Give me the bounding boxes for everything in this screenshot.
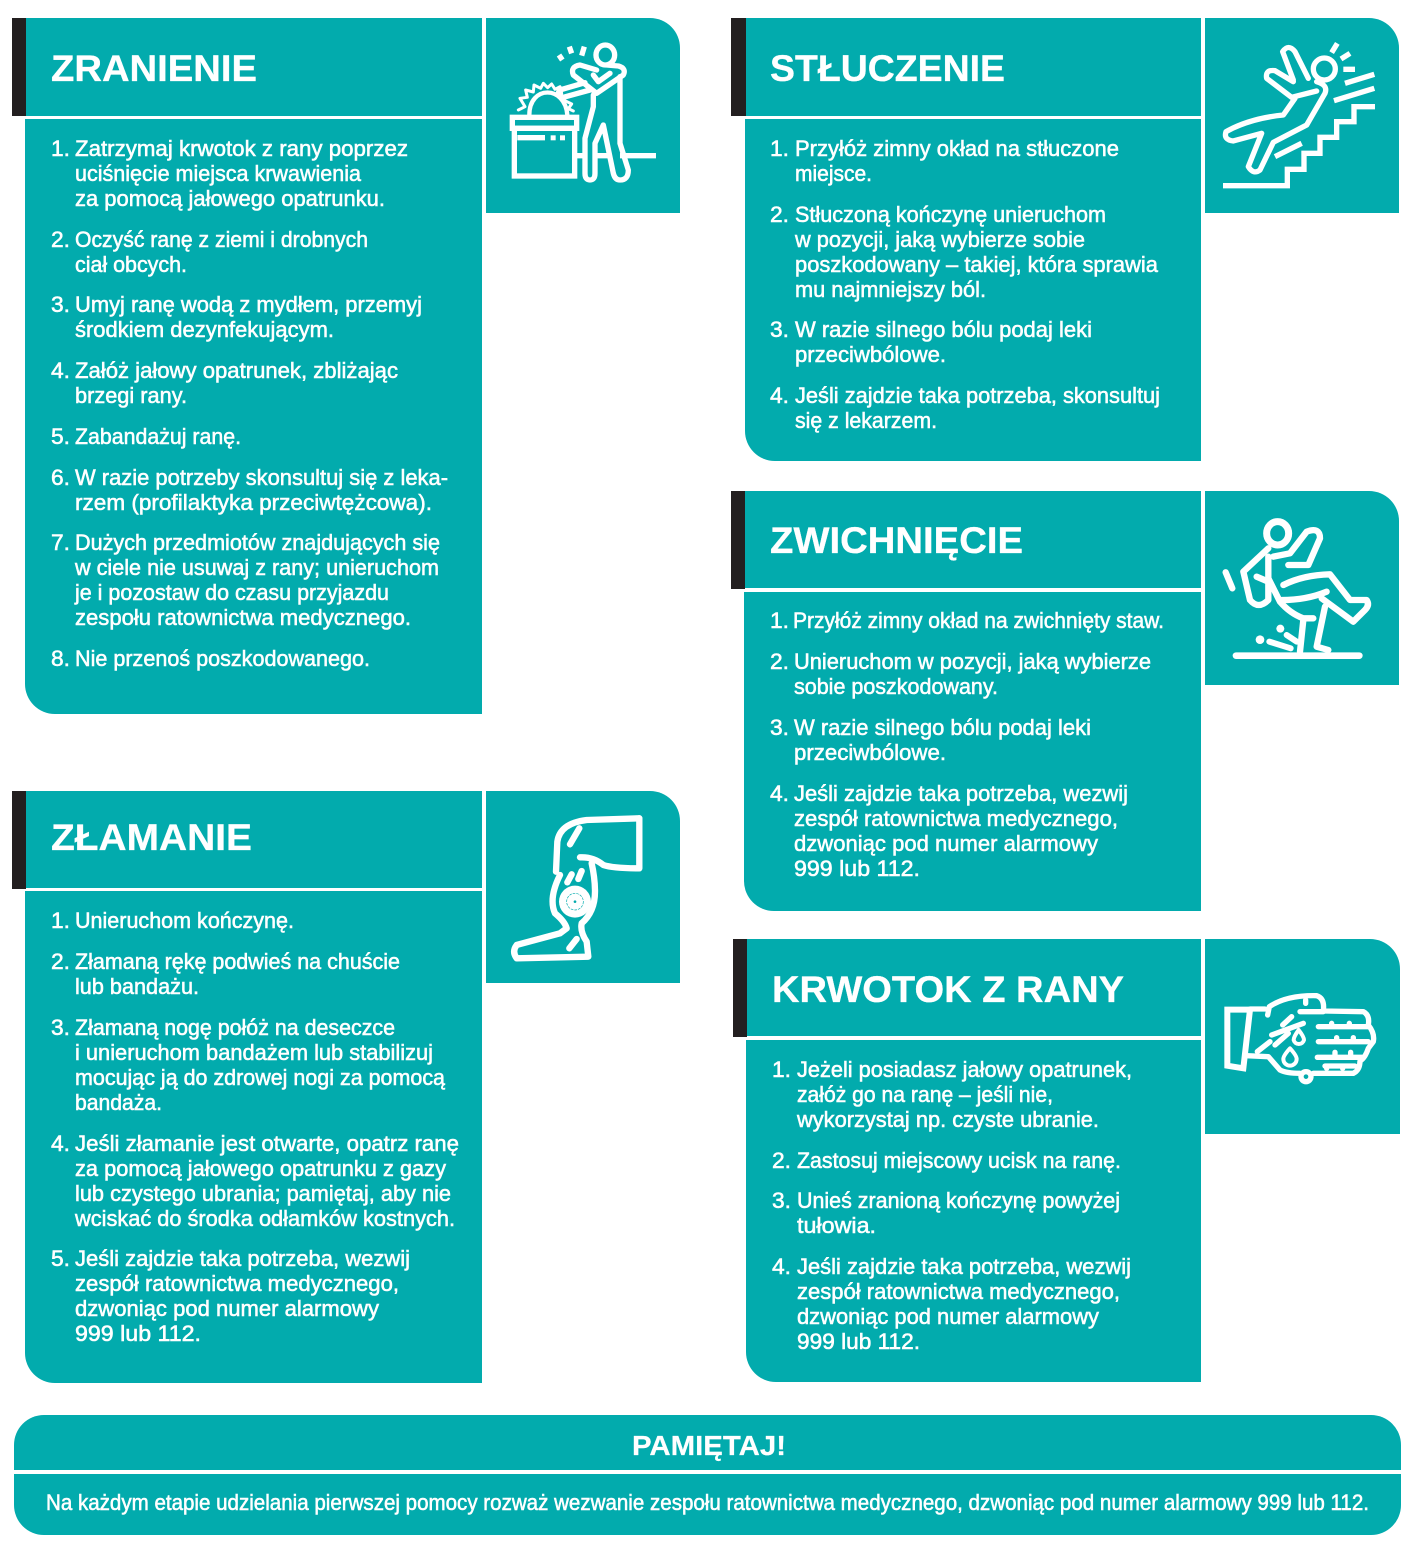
body: krwotok z rany steps: Jeśli zajdzie taka potrzeba, wezwij	[797, 1254, 1131, 1279]
heading: zranienie: ZRANIENIE	[51, 48, 257, 89]
body: zranienie steps: 1.	[51, 136, 70, 161]
body: zwichnięcie steps: Przyłóż zimny okład na zwichnięty staw.	[793, 608, 1164, 633]
body: zranienie steps: Oczyść ranę z ziemi i drobnych	[75, 227, 368, 252]
body: złamanie steps: Jeśli złamanie jest otwarte, opatrz ranę	[75, 1131, 459, 1156]
banner text: reminder	[14, 1474, 1401, 1535]
body: złamanie steps: 3.	[51, 1015, 70, 1040]
body: zranienie steps: 6.	[51, 465, 70, 490]
body: stłuczenie steps: w pozycji, jaką wybierze sobie	[794, 227, 1085, 252]
panel: złamanie	[12, 791, 680, 1383]
body: stłuczenie steps: mu najmniejszy ból.	[795, 277, 986, 302]
panel: zwichnięcie	[731, 491, 1399, 911]
body: zranienie steps: Nie przenoś poszkodowanego.	[75, 646, 370, 671]
body: zranienie steps: środkiem dezynfekującym.	[75, 317, 334, 342]
header bar: krwotok z rany	[733, 939, 1201, 1037]
body: złamanie steps: lub bandażu.	[75, 974, 199, 999]
body: złamanie steps: Złamaną nogę połóż na deseczce	[75, 1015, 395, 1040]
heading: krwotok z rany: KRWOTOK Z RANY	[772, 969, 1124, 1010]
body: zranienie steps: zespołu ratownictwa medycznego.	[75, 605, 411, 630]
body: zranienie steps: Umyj ranę wodą z mydłem, przemyj	[75, 292, 422, 317]
body: złamanie steps: 1.	[51, 908, 70, 933]
body: krwotok z rany steps: 2.	[772, 1148, 791, 1173]
body: zwichnięcie steps	[744, 592, 1201, 911]
body: złamanie steps: 2.	[51, 949, 70, 974]
body: stłuczenie steps: poszkodowany – takiej, która sprawia	[795, 252, 1159, 277]
body: zranienie steps: rzem (profilaktyka przeciwtężcowa).	[75, 490, 432, 515]
body: krwotok z rany steps: Jeżeli posiadasz jałowy opatrunek,	[797, 1057, 1132, 1082]
body: zranienie steps: 5.	[51, 424, 70, 449]
body: złamanie steps: mocując ją do zdrowej nogi za pomocą	[75, 1065, 446, 1090]
body: zranienie steps: 8.	[51, 646, 70, 671]
body: zwichnięcie steps: W razie silnego bólu podaj leki	[794, 715, 1091, 740]
body: stłuczenie steps: 2.	[770, 202, 789, 227]
body: zwichnięcie steps: 1.	[770, 608, 789, 633]
body: złamanie steps: wciskać do środka odłamków kostnych.	[74, 1206, 455, 1231]
body: krwotok z rany steps: wykorzystaj np. czyste ubranie.	[796, 1107, 1099, 1132]
body: złamanie steps: i unieruchom bandażem lub stabilizuj	[75, 1040, 433, 1065]
body: złamanie steps: Jeśli zajdzie taka potrzeba, wezwij	[75, 1246, 410, 1271]
body: stłuczenie steps: 4.	[770, 383, 789, 408]
icon panel: person falling on stairs	[1205, 18, 1399, 213]
body: stłuczenie steps: W razie silnego bólu podaj leki	[795, 317, 1092, 342]
header bar: złamanie	[12, 791, 482, 889]
body: zranienie steps: uciśnięcie miejsca krwawienia	[75, 161, 362, 186]
panel: stłuczenie	[731, 18, 1399, 461]
body: stłuczenie steps: przeciwbólowe.	[795, 342, 946, 367]
body: stłuczenie steps	[745, 119, 1201, 461]
body: złamanie steps: 4.	[51, 1131, 70, 1156]
body: stłuczenie steps: miejsce.	[795, 161, 872, 186]
body: zranienie steps: Zabandażuj ranę.	[75, 424, 241, 449]
body: zranienie steps: Załóż jałowy opatrunek, zbliżając	[75, 358, 398, 383]
body: zwichnięcie steps: przeciwbólowe.	[794, 740, 946, 765]
body: stłuczenie steps: Stłuczoną kończynę unieruchom	[795, 202, 1106, 227]
panel: pamiętaj	[14, 1415, 1401, 1535]
body: krwotok z rany steps	[746, 1040, 1201, 1382]
body: zwichnięcie steps: sobie poszkodowany.	[794, 674, 998, 699]
heading: złamanie: ZŁAMANIE	[51, 817, 252, 858]
banner heading: pamiętaj: PAMIĘTAJ!	[632, 1430, 786, 1461]
header bar: stłuczenie	[731, 18, 1201, 116]
body: krwotok z rany steps: załóż go na ranę – jeśli nie,	[797, 1082, 1053, 1107]
body: zranienie steps: Zatrzymaj krwotok z rany poprzez	[75, 136, 408, 161]
body: zwichnięcie steps: 4.	[770, 781, 789, 806]
body: zwichnięcie steps: zespół ratownictwa medycznego,	[794, 806, 1118, 831]
body: złamanie steps: Złamaną rękę podwieś na chuście	[75, 949, 400, 974]
body: krwotok z rany steps: 3.	[772, 1188, 791, 1213]
body: zwichnięcie steps: Jeśli zajdzie taka potrzeba, wezwij	[794, 781, 1128, 806]
heading: zwichnięcie: ZWICHNIĘCIE	[770, 520, 1023, 561]
body: krwotok z rany steps: 999 lub 112.	[797, 1329, 920, 1354]
icon panel: broken leg	[486, 791, 680, 983]
panel: zranienie	[12, 18, 680, 714]
body: zranienie steps: ciał obcych.	[75, 252, 187, 277]
body: stłuczenie steps: się z lekarzem.	[795, 408, 937, 433]
body: zranienie steps: 3.	[51, 292, 70, 317]
body: zranienie steps: brzegi rany.	[75, 383, 187, 408]
body: zwichnięcie steps: 999 lub 112.	[794, 856, 920, 881]
body: zranienie steps	[25, 119, 482, 714]
body: krwotok z rany steps: Unieś zranioną kończynę powyżej	[797, 1188, 1120, 1213]
body: zranienie steps: w ciele nie usuwaj z rany; unieruchom	[74, 555, 439, 580]
body: zwichnięcie steps: Unieruchom w pozycji, jaką wybierze	[794, 649, 1151, 674]
panel: krwotok z rany	[733, 939, 1400, 1382]
body: stłuczenie steps: Jeśli zajdzie taka potrzeba, skonsultuj	[795, 383, 1160, 408]
body: krwotok z rany steps: 1.	[772, 1057, 791, 1082]
body: stłuczenie steps: 3.	[770, 317, 789, 342]
icon panel: person slipping	[1205, 491, 1399, 685]
body: krwotok z rany steps: tułowia.	[797, 1213, 876, 1238]
body: złamanie steps: dzwoniąc pod numer alarmowy	[75, 1296, 379, 1321]
body: zranienie steps: 2.	[51, 227, 70, 252]
body: zranienie steps: 4.	[51, 358, 70, 383]
body: zranienie steps: je i pozostaw do czasu przyjazdu	[74, 580, 389, 605]
icon panel: person hitting cactus	[486, 18, 680, 213]
icon panel: bleeding hand	[1205, 939, 1400, 1134]
body: stłuczenie steps: 1.	[770, 136, 789, 161]
body: krwotok z rany steps: 4.	[772, 1254, 791, 1279]
body: stłuczenie steps: Przyłóż zimny okład na stłuczone	[795, 136, 1119, 161]
body: złamanie steps: 999 lub 112.	[75, 1321, 201, 1346]
body: złamanie steps: Unieruchom kończynę.	[75, 908, 294, 933]
banner heading: pamiętaj	[14, 1415, 1401, 1470]
body: złamanie steps: 5.	[51, 1246, 70, 1271]
body: krwotok z rany steps: zespół ratownictwa medycznego,	[797, 1279, 1120, 1304]
body: krwotok z rany steps: Zastosuj miejscowy ucisk na ranę.	[797, 1148, 1121, 1173]
body: zranienie steps: 7.	[51, 530, 70, 555]
body: złamanie steps: lub czystego ubrania; pamiętaj, aby nie	[75, 1181, 451, 1206]
body: zwichnięcie steps: 3.	[770, 715, 789, 740]
body: złamanie steps: za pomocą jałowego opatrunku z gazy	[75, 1156, 446, 1181]
body: krwotok z rany steps: dzwoniąc pod numer alarmowy	[797, 1304, 1099, 1329]
header bar: zwichnięcie	[731, 491, 1201, 589]
heading: stłuczenie: STŁUCZENIE	[770, 48, 1005, 89]
header bar: zranienie	[12, 18, 482, 116]
body: zwichnięcie steps: 2.	[770, 649, 789, 674]
body: złamanie steps	[25, 891, 482, 1383]
body: zranienie steps: W razie potrzeby skonsultuj się z leka-	[75, 465, 448, 490]
body: zranienie steps: Dużych przedmiotów znajdujących się	[75, 530, 440, 555]
body: złamanie steps: zespół ratownictwa medycznego,	[75, 1271, 399, 1296]
body: zwichnięcie steps: dzwoniąc pod numer alarmowy	[794, 831, 1098, 856]
body: złamanie steps: bandaża.	[75, 1090, 162, 1115]
body: zranienie steps: za pomocą jałowego opatrunku.	[75, 186, 385, 211]
